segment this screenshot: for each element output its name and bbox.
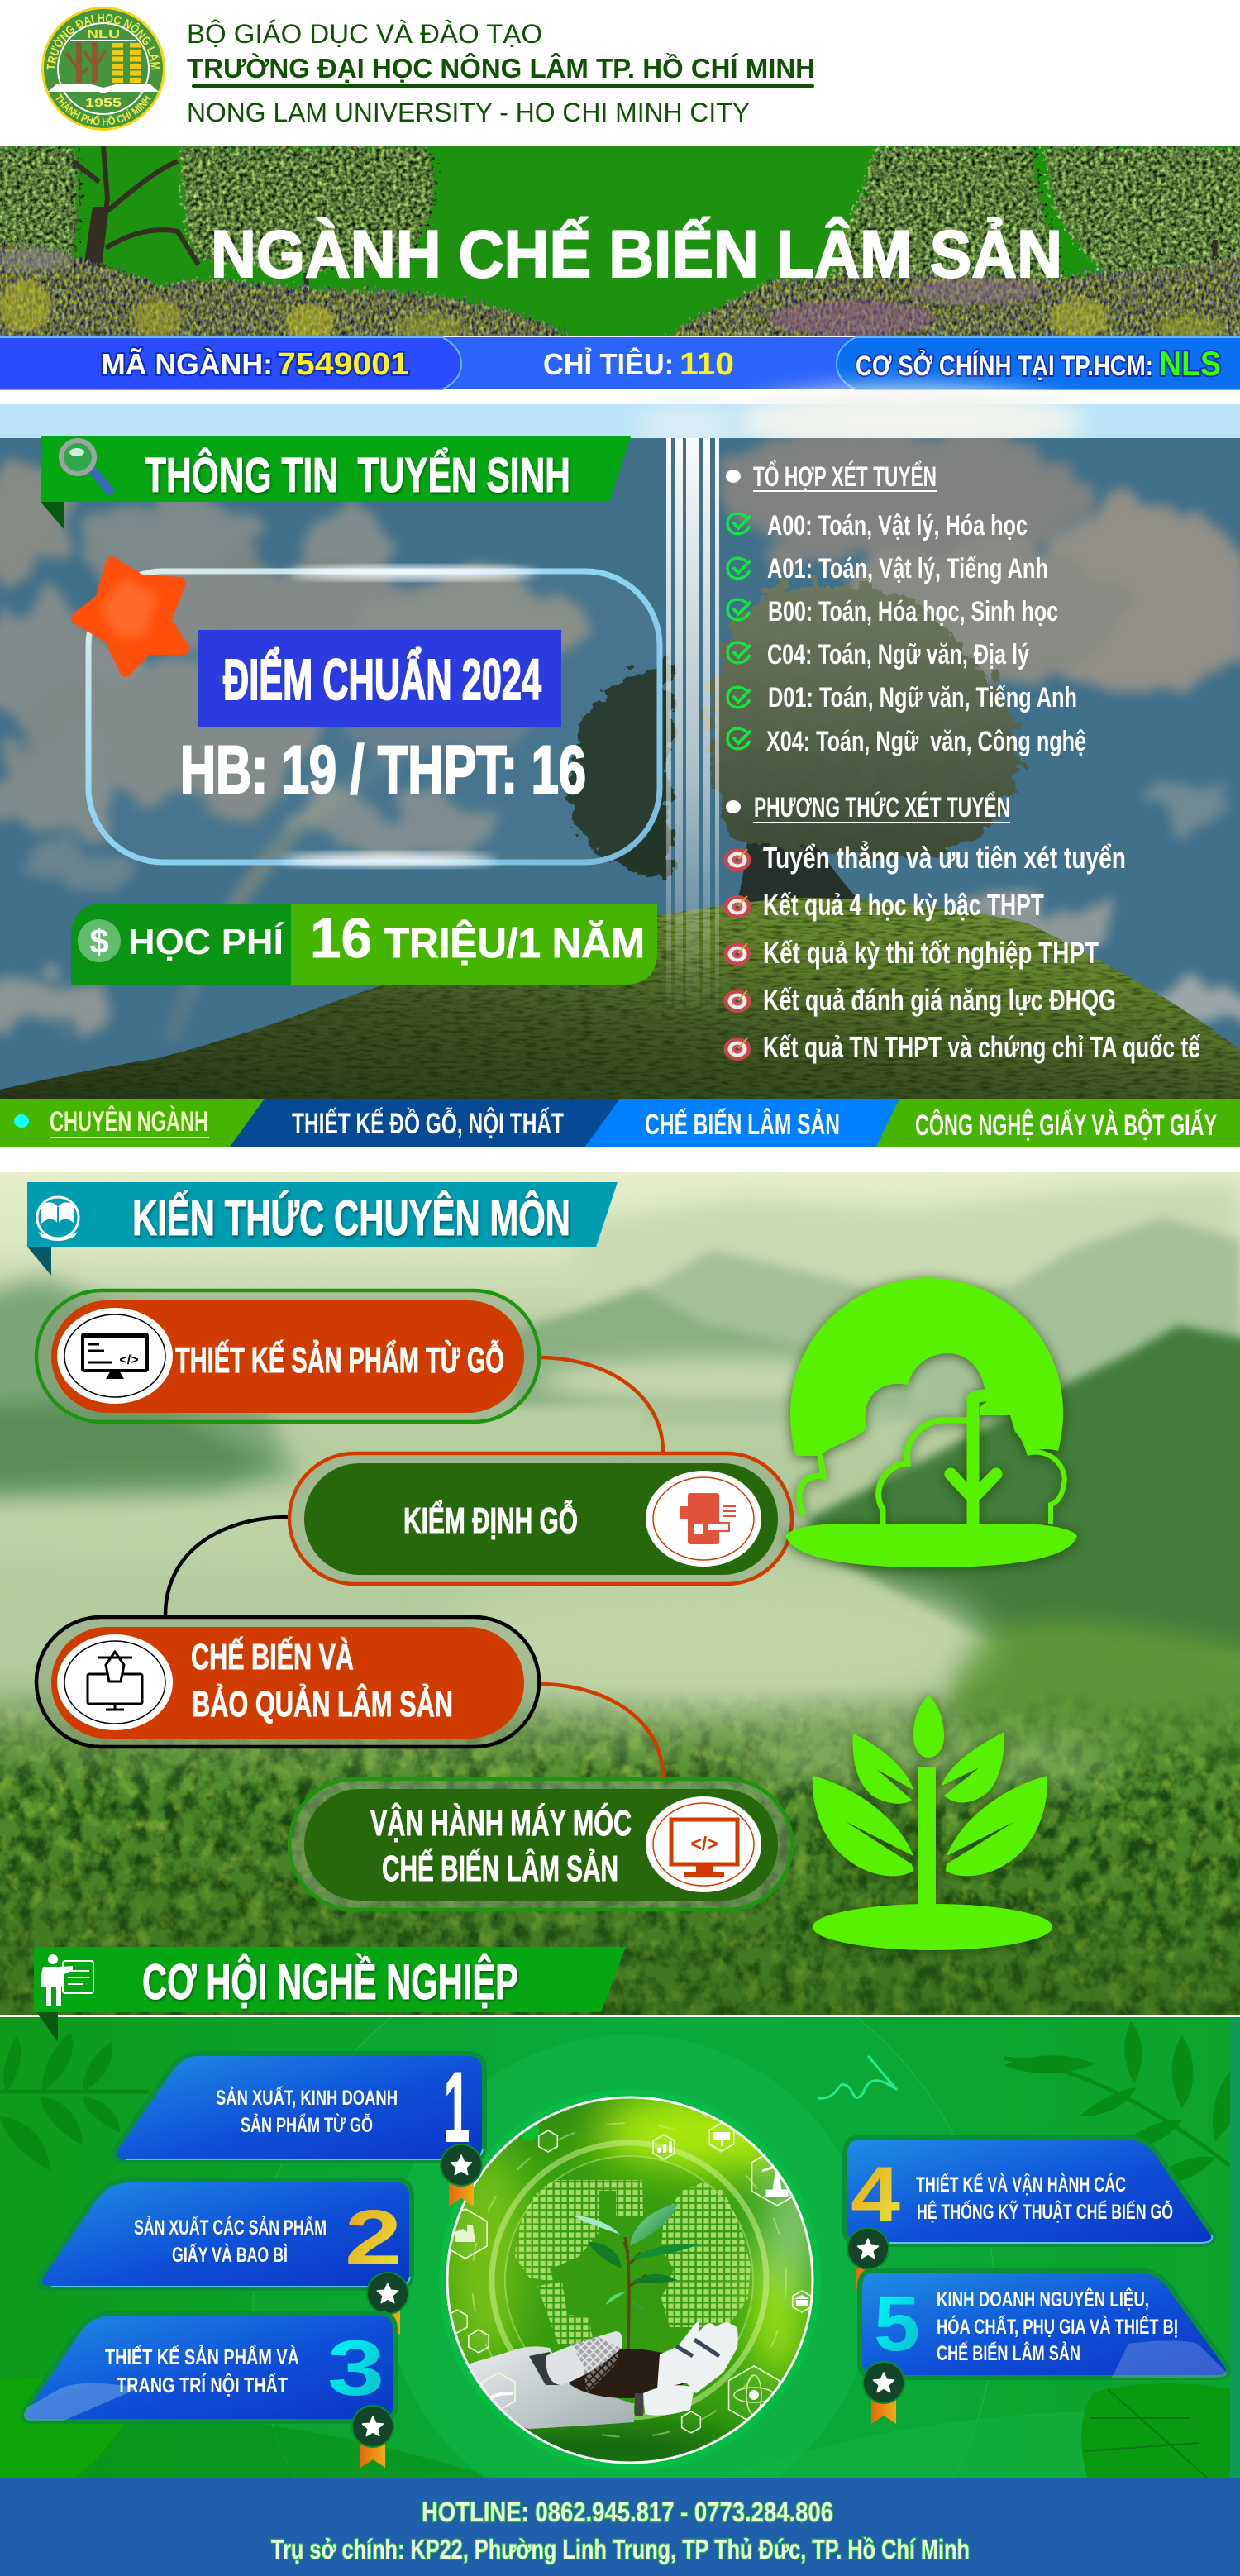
card 4 text: THIẾT KẾ VÀ VẬN HÀNH CÁC xyxy=(916,2172,1126,2197)
icon: code screen xyxy=(646,1796,761,1892)
card 1: 1 xyxy=(444,2052,470,2163)
card 2 text: SẢN XUẤT CÁC SẢN PHẨM xyxy=(134,2215,327,2240)
panel: admission heading xyxy=(41,436,631,530)
leaves: top right xyxy=(1004,2021,1230,2183)
pill: machine operation xyxy=(289,1779,792,1910)
pill: wood inspection xyxy=(289,1453,792,1584)
ministry name: BỘ GIÁO DỤC VÀ ĐÀO TẠO xyxy=(187,19,542,49)
panel: info bar: NLS xyxy=(1159,344,1221,383)
card 1: SẢN PHẨM TỪ GỖ xyxy=(241,2112,373,2137)
main title: NGÀNH CHẾ BIẾN LÂM SẢN xyxy=(211,217,1062,292)
icon: device xyxy=(646,1471,761,1567)
soil xyxy=(564,2349,689,2398)
benchmark label xyxy=(198,630,561,727)
card 3: TRANG TRÍ NỘI THẤT xyxy=(117,2373,288,2397)
address: Trụ sở chính: KP22, Phường Linh Trung, TP Thủ Đức, TP. Hồ Chí Minh xyxy=(271,2534,970,2564)
method 2 xyxy=(724,888,1044,922)
panel: specialization bar xyxy=(0,1099,1240,1147)
icon: presenter xyxy=(41,1954,93,2006)
pill: forest processing: BẢO QUẢN LÂM SẢN xyxy=(192,1683,453,1724)
panel: subject combinations xyxy=(726,461,1086,757)
specialization label: CHUYÊN NGÀNH xyxy=(50,1106,208,1138)
icon: code monitor xyxy=(57,1308,173,1404)
card 4 xyxy=(845,2137,1214,2290)
card 2 number: 2 xyxy=(345,2194,402,2282)
university name: TRƯỜNG ĐẠI HỌC NÔNG LÂM TP. HỒ CHÍ MINH xyxy=(187,52,815,83)
card 5 badge xyxy=(862,2361,905,2424)
method 4: Kết quả đánh giá năng lực ĐHQG xyxy=(763,983,1116,1017)
card 1 text: SẢN XUẤT, KINH DOANH xyxy=(216,2085,398,2110)
tree canopies xyxy=(0,146,1240,289)
rainbow xyxy=(169,761,397,1042)
icon: magnifier xyxy=(61,441,110,491)
icon: dollar xyxy=(78,919,121,962)
card 3 text: THIẾT KẾ SẢN PHẨM VÀ xyxy=(105,2345,299,2369)
tree trunks xyxy=(73,146,1215,308)
panel: info bar xyxy=(0,337,1240,389)
panel: tuition xyxy=(71,904,657,985)
seedling xyxy=(573,2203,699,2349)
card 2: GIẤY VÀ BAO BÌ xyxy=(172,2243,288,2267)
list item A00 xyxy=(727,510,1028,541)
pill text: VẬN HÀNH MÁY MÓC xyxy=(370,1802,632,1844)
english name: NONG LAM UNIVERSITY - HO CHI MINH CITY xyxy=(187,98,750,127)
card 3 number: 3 xyxy=(327,2325,384,2412)
panel: knowledge heading xyxy=(27,1182,618,1276)
card 5 number: 5 xyxy=(874,2280,920,2368)
card 4 number: 4 xyxy=(851,2151,900,2239)
robot hand left xyxy=(467,2346,634,2429)
logo: 1955 xyxy=(85,96,122,110)
icon: tree dome xyxy=(785,1278,1077,1567)
panel: knowledge background xyxy=(0,1172,1240,2017)
decorative stripes xyxy=(666,438,719,1009)
leaves: top left xyxy=(0,2032,149,2170)
heading text: THÔNG TIN TUYỂN SINH xyxy=(145,447,570,503)
method 4 xyxy=(724,983,1116,1017)
logo xyxy=(41,7,165,131)
pill: campus xyxy=(837,337,1240,389)
globe dots xyxy=(515,2180,751,2344)
hotline: HOTLINE: 0862.945.817 - 0773.284.806 xyxy=(422,2497,833,2527)
panel: info bar: 7549001 xyxy=(277,347,409,382)
card 2 xyxy=(40,2180,412,2335)
card 2 badge xyxy=(366,2272,409,2335)
list item X04: X04: Toán, Ngữ văn, Công nghệ xyxy=(766,726,1086,757)
connector: pill 2 to pill 3 xyxy=(165,1517,288,1615)
tuition label: HỌC PHÍ xyxy=(128,921,285,962)
list item C04: C04: Toán, Ngữ văn, Địa lý xyxy=(767,639,1029,670)
card 3 badge xyxy=(351,2405,394,2468)
illustration: globe with seedling xyxy=(438,2089,821,2478)
list item X04 xyxy=(727,726,1086,757)
logo: NLU xyxy=(87,27,120,41)
leaf: bottom left xyxy=(0,2378,136,2478)
pill text: CHẾ BIẾN VÀ xyxy=(191,1636,354,1677)
list item C04 xyxy=(727,639,1029,670)
tree xyxy=(739,842,856,903)
logo: TRƯỜNG ĐẠI HỌC NÔNG LÂM xyxy=(46,13,160,69)
hexagon icons xyxy=(444,2123,811,2433)
benchmark score: HB: 19 / THPT: 16 xyxy=(180,732,586,808)
card 5 text: KINH DOANH NGUYÊN LIỆU, xyxy=(937,2287,1149,2311)
pill: forest processing xyxy=(36,1617,539,1747)
method 1: Tuyển thẳng và ưu tiên xét tuyển xyxy=(763,840,1126,875)
pill text: KIỂM ĐỊNH GỖ xyxy=(403,1499,578,1541)
logo: THÀNH PHỐ HỒ CHÍ MINH xyxy=(55,93,151,126)
quota: CHỈ TIÊU: xyxy=(543,346,674,381)
list item A01 xyxy=(727,553,1048,584)
pill: machine operation: CHẾ BIẾN LÂM SẢN xyxy=(382,1848,618,1889)
card 5 xyxy=(860,2270,1228,2424)
card 1 xyxy=(114,2052,484,2206)
heading text: KIẾN THỨC CHUYÊN MÔN xyxy=(132,1190,570,1246)
list item B00: B00: Toán, Hóa học, Sinh học xyxy=(768,596,1058,627)
panel: careers heading xyxy=(34,1947,626,2042)
heading: combinations: TỔ HỢP XÉT TUYỂN xyxy=(753,461,937,493)
icon: sprout xyxy=(813,1695,1052,1950)
icon: star xyxy=(77,562,184,671)
icon: design tool xyxy=(57,1634,173,1730)
globe lighting xyxy=(438,2092,818,2478)
method 3: Kết quả kỳ thi tốt nghiệp THPT xyxy=(763,936,1099,970)
panel: tuition: $ xyxy=(89,922,109,961)
list item A01: A01: Toán, Vật lý, Tiếng Anh xyxy=(767,553,1048,584)
major code: MÃ NGÀNH: xyxy=(101,346,273,381)
connector: pill 1 to pill 2 xyxy=(541,1357,663,1452)
panel: footer xyxy=(0,2478,1240,2576)
connector: pill 3 to pill 4 xyxy=(541,1684,663,1777)
panel: admission background xyxy=(0,389,1240,1099)
heading: methods: PHƯƠNG THỨC XÉT TUYỂN xyxy=(754,792,1010,823)
card 1 badge xyxy=(440,2144,483,2206)
panel: benchmark card xyxy=(77,562,660,866)
icon: code monitor: </> xyxy=(119,1353,139,1367)
specialization 2: CHẾ BIẾN LÂM SẢN xyxy=(645,1108,840,1141)
tuition value: 16 xyxy=(310,907,372,970)
panel: info bar: 110 xyxy=(680,347,734,382)
specialization 1: THIẾT KẾ ĐỒ GỖ, NỘI THẤT xyxy=(292,1107,564,1140)
campus: CƠ SỞ CHÍNH TẠI TP.HCM: xyxy=(856,351,1153,382)
pill text: THIẾT KẾ SẢN PHẨM TỪ GỖ xyxy=(175,1338,504,1381)
list item B00 xyxy=(727,596,1058,627)
leaf: bottom right xyxy=(1081,2383,1230,2478)
thumb xyxy=(546,2331,622,2385)
panel: careers background xyxy=(0,2015,1240,2478)
list item A00: A00: Toán, Vật lý, Hóa học xyxy=(767,510,1028,541)
hill xyxy=(0,898,1240,1099)
squiggle xyxy=(818,2056,897,2098)
icon: code screen: </> xyxy=(690,1833,718,1854)
list item D01: D01: Toán, Ngữ văn, Tiếng Anh xyxy=(768,682,1077,713)
shrubs xyxy=(0,240,1240,336)
pill: code xyxy=(0,337,461,389)
panel: benchmark card: ĐIỂM CHUẨN 2024 xyxy=(223,646,541,712)
panel: header xyxy=(41,7,815,131)
icon: book xyxy=(37,1197,79,1241)
card 3 xyxy=(23,2313,395,2468)
robot hand right xyxy=(643,2385,694,2416)
method 2: Kết quả 4 học kỳ bậc THPT xyxy=(763,888,1044,922)
globe rings xyxy=(472,2123,786,2437)
card 5: CHẾ BIẾN LÂM SẢN xyxy=(937,2340,1080,2365)
list item D01 xyxy=(727,682,1077,713)
card 4 badge xyxy=(847,2227,889,2290)
panel: tuition: TRIỆU/1 NĂM xyxy=(384,920,645,966)
panel: title banner xyxy=(0,146,1240,355)
heading text: CƠ HỘI NGHỀ NGHIỆP xyxy=(142,1954,518,2010)
pill: product design xyxy=(36,1290,539,1422)
panel: admission methods xyxy=(724,792,1201,1064)
